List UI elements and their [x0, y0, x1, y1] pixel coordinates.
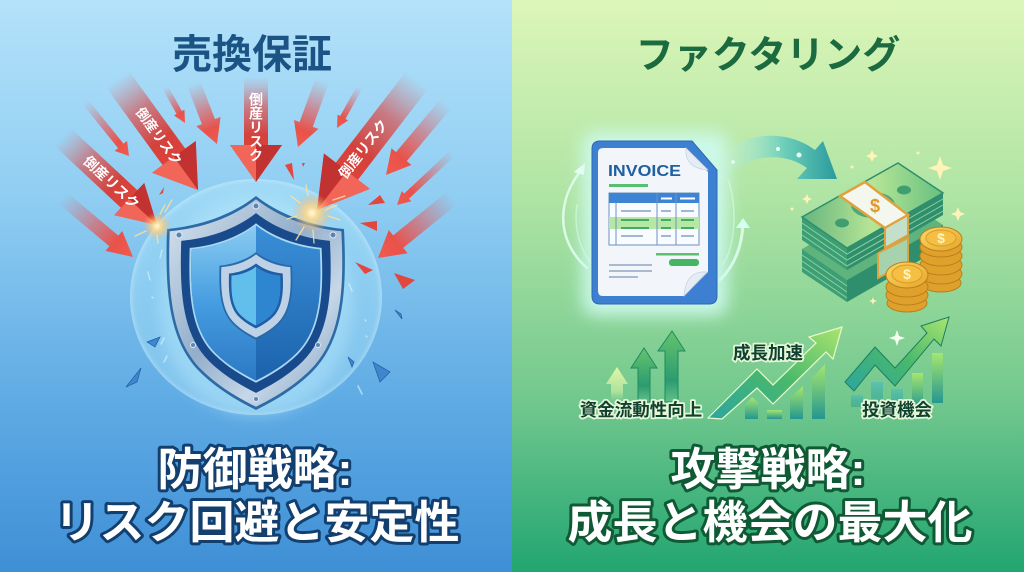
- illustration: cash stack: [790, 150, 965, 312]
- invoice button: [669, 259, 699, 266]
- label: 投資機会: 投資機会: [862, 400, 932, 420]
- shield rivets: [176, 203, 336, 402]
- lower bills: [802, 195, 943, 302]
- chart: investment opportunity: [845, 317, 949, 408]
- big risk arrow 3: [230, 77, 282, 182]
- heading: 防御戦略: リスク回避と安定性: [54, 497, 460, 548]
- lower band: [878, 238, 908, 278]
- arrow label 1: 倒産リスク: [80, 153, 142, 212]
- shield outer rim: [167, 196, 345, 410]
- shield light line: [189, 223, 322, 383]
- money band: [840, 182, 908, 248]
- title: 売換保証: 売換保証: [172, 33, 332, 77]
- impact sparks: [135, 185, 345, 243]
- big risk arrow 1: [48, 121, 172, 241]
- coin stack large: [920, 227, 962, 292]
- shield face right: [191, 225, 320, 381]
- coin symbol small: $: [903, 266, 911, 282]
- big risk arrow 2: [96, 63, 220, 206]
- invoice glow: [582, 132, 728, 316]
- illustration: invoice document: [582, 132, 728, 316]
- arrow label 2: 倒産リスク: [133, 104, 185, 168]
- chart: growth acceleration: [708, 327, 842, 419]
- invoice folds: [684, 148, 708, 296]
- invoice underline: [609, 184, 648, 187]
- arrow label 4: 倒産リスク: [335, 116, 391, 181]
- invoice blue frame: [592, 141, 717, 304]
- title: ファクタリング: ファクタリング: [636, 35, 900, 77]
- arrow: invoice to cash: [717, 136, 837, 180]
- arrow label 3: 倒産リスク: [248, 91, 264, 162]
- panel: right background: [512, 0, 1024, 572]
- illustration: risk arrows: [48, 62, 462, 270]
- money band: $: [870, 196, 880, 216]
- blue shards: [126, 310, 402, 387]
- illustration: shield: [158, 195, 354, 415]
- red shards: [159, 163, 415, 289]
- invoice text lines: [609, 265, 652, 277]
- heading: 攻撃戦略: 成長と機会の最大化: [567, 497, 973, 548]
- shield dark band: [181, 213, 331, 393]
- shield glow: [158, 195, 354, 415]
- label: 資金流動性向上: 資金流動性向上: [580, 400, 702, 420]
- label: 成長加速: 成長加速: [733, 343, 803, 363]
- illustration: protective bubble: [130, 179, 382, 415]
- panel: left background: [0, 0, 512, 572]
- heading: 攻撃戦略: 攻撃戦略:: [670, 444, 866, 495]
- invoice table: [609, 193, 699, 245]
- shield face left: [191, 226, 256, 380]
- coin stack small: [886, 262, 928, 312]
- sparkles: [790, 150, 965, 305]
- heading: 攻撃戦略: [567, 444, 973, 548]
- big risk arrow 4: [294, 62, 440, 228]
- heading: 防御戦略: 防御戦略:: [158, 444, 352, 495]
- glass fragments: [148, 250, 367, 394]
- invoice heading: INVOICE: [608, 163, 681, 180]
- small risk arrows: [54, 76, 462, 270]
- upper bills: [802, 163, 943, 270]
- chart: rising arrows: [606, 331, 685, 402]
- invoice total: [656, 253, 699, 256]
- shield silver ring: [169, 199, 342, 407]
- heading: 防御戦略: [54, 444, 460, 548]
- illustration: rotation arcs around invoice: [563, 163, 750, 280]
- coin symbol large: $: [937, 230, 945, 246]
- invoice page: [598, 148, 708, 296]
- inner shield: [219, 252, 292, 340]
